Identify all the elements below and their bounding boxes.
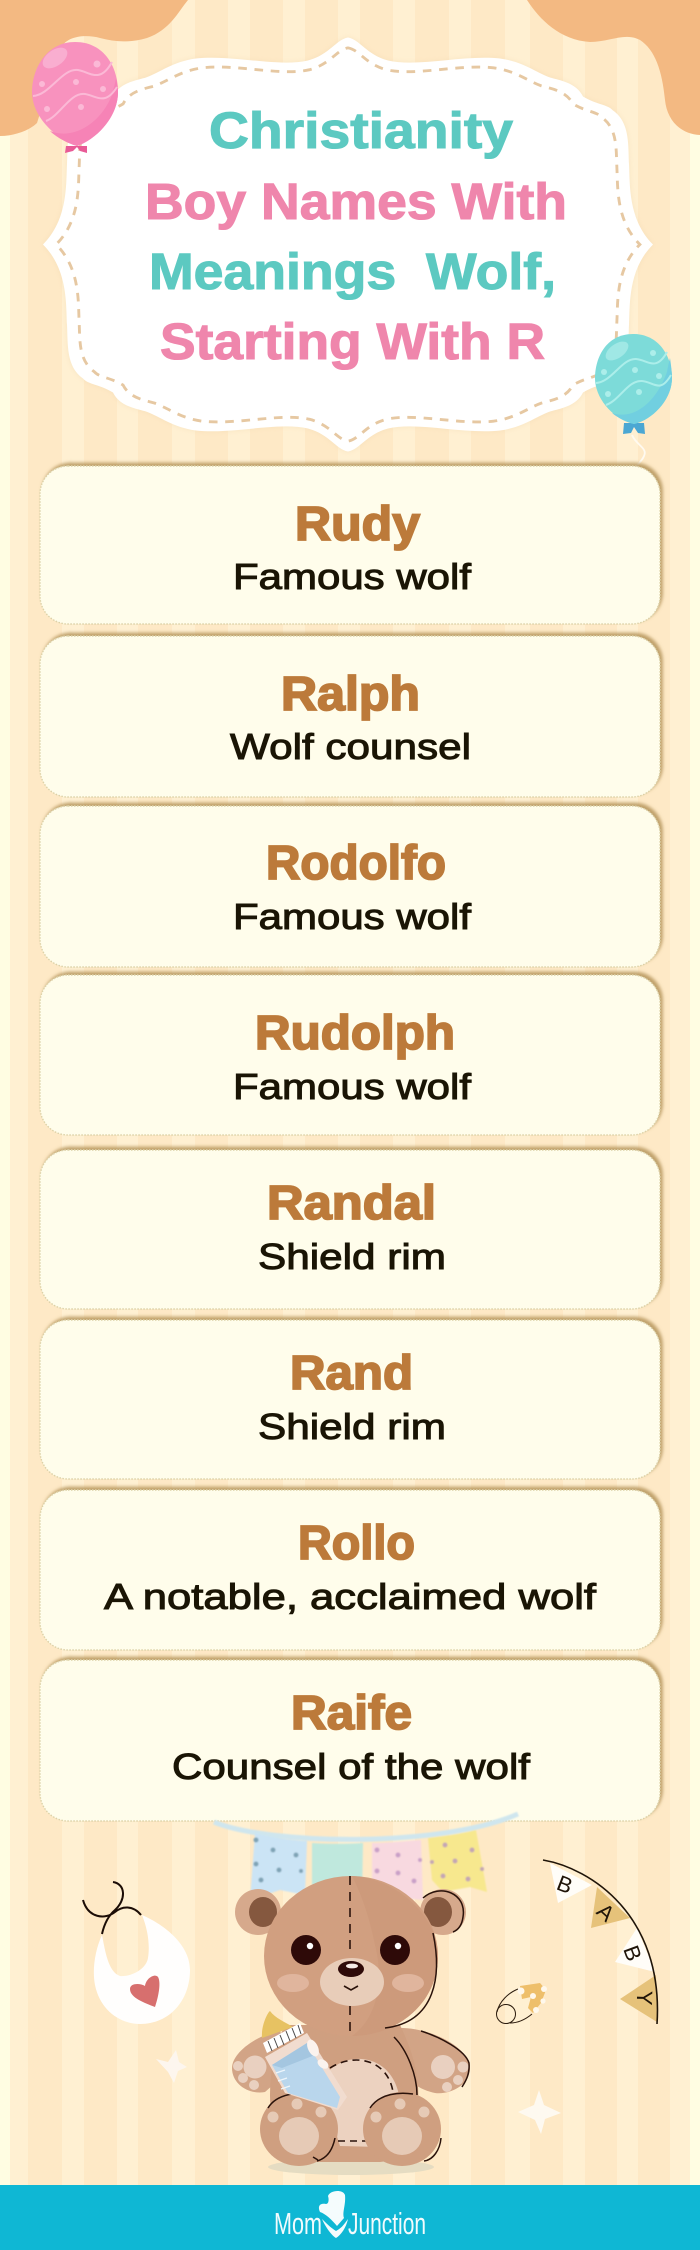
title line 4: Starting With R bbox=[160, 313, 545, 370]
meaning: Famous wolf: Famous wolf bbox=[233, 896, 472, 937]
card: Rollo bbox=[40, 1490, 660, 1650]
meaning: Wolf counsel: Wolf counsel bbox=[230, 726, 471, 767]
card: Rudy bbox=[40, 466, 660, 624]
name: Rudolph: Rudolph bbox=[255, 1007, 455, 1060]
card: Ralph bbox=[40, 636, 660, 797]
ground shadow bbox=[268, 2159, 434, 2175]
meaning: Famous wolf: Famous wolf bbox=[233, 1066, 472, 1107]
icon: teal balloon with string bbox=[595, 334, 672, 468]
icon: safety pin bbox=[496, 1983, 547, 2024]
meaning: Shield rim: Shield rim bbox=[258, 1236, 446, 1277]
right foot bbox=[363, 2092, 441, 2166]
meaning: A notable, acclaimed wolf: A notable, acclaimed wolf bbox=[104, 1576, 597, 1617]
meaning: Famous wolf: Famous wolf bbox=[233, 556, 472, 597]
letter A: A bbox=[592, 1898, 620, 1927]
illustration: teddy bear bbox=[232, 1876, 470, 2175]
left foot bbox=[260, 2092, 338, 2166]
name: Rodolfo: Rodolfo bbox=[266, 837, 446, 890]
icon: pink balloon bbox=[32, 42, 118, 153]
right arm bbox=[395, 2028, 470, 2093]
top left drape bbox=[0, 0, 188, 136]
logo icon: mother and child bbox=[319, 2191, 348, 2238]
letter Y: Y bbox=[632, 1990, 657, 2006]
outline strokes bbox=[268, 1891, 469, 2161]
heart bbox=[130, 1976, 159, 2007]
muzzle bbox=[320, 1958, 384, 2006]
arm paws bbox=[233, 2055, 468, 2092]
card: Rudolph bbox=[40, 975, 660, 1135]
left arm bbox=[232, 2030, 290, 2093]
footer bar bbox=[0, 2185, 700, 2250]
bib ties bbox=[83, 1882, 141, 1934]
name: Rollo: Rollo bbox=[298, 1517, 415, 1570]
icon: baby banner bbox=[543, 1860, 657, 2024]
meaning: Shield rim: Shield rim bbox=[258, 1406, 446, 1447]
illustration: bunting flags bbox=[214, 1814, 518, 1900]
name: Raife: Raife bbox=[291, 1687, 412, 1740]
name: Randal: Randal bbox=[267, 1177, 436, 1230]
card: Rodolfo bbox=[40, 806, 660, 967]
icon: star right bbox=[518, 2090, 561, 2134]
title line 1: Christianity bbox=[209, 102, 514, 159]
name: Ralph: Ralph bbox=[281, 668, 420, 721]
panel: name list bbox=[40, 466, 660, 1821]
letter B: B bbox=[553, 1870, 576, 1899]
head seam bbox=[349, 1876, 351, 2034]
name: Rand: Rand bbox=[290, 1347, 413, 1400]
baby bottle bbox=[262, 2011, 347, 2110]
smile bbox=[344, 1986, 358, 1990]
card: Rand bbox=[40, 1320, 660, 1479]
right ear bbox=[420, 1889, 466, 1935]
belly patch bbox=[325, 2059, 400, 2147]
name: Rudy: Rudy bbox=[295, 498, 420, 551]
letter B: B bbox=[618, 1942, 647, 1964]
title line 3: Meanings Wolf, bbox=[149, 243, 556, 300]
frame: white scalloped plaque bbox=[43, 38, 653, 452]
top right drape bbox=[527, 0, 700, 135]
logo text: Junction: Junction bbox=[348, 2206, 426, 2241]
card: Randal bbox=[40, 1150, 660, 1309]
body bbox=[270, 2025, 418, 2162]
left ear bbox=[235, 1889, 281, 1935]
icon: star left bbox=[156, 2050, 187, 2083]
eyes bbox=[291, 1935, 321, 1965]
card: Raife bbox=[40, 1660, 660, 1821]
title panel bbox=[43, 38, 653, 452]
icon: bib with heart bbox=[83, 1882, 190, 2024]
cheeks bbox=[277, 1974, 309, 1992]
head bbox=[264, 1876, 438, 2036]
nose bbox=[338, 1961, 364, 1977]
meaning: Counsel of the wolf: Counsel of the wolf bbox=[172, 1746, 531, 1787]
title line 2: Boy Names With bbox=[145, 173, 567, 230]
logo text: Mom: Mom bbox=[274, 2206, 322, 2241]
